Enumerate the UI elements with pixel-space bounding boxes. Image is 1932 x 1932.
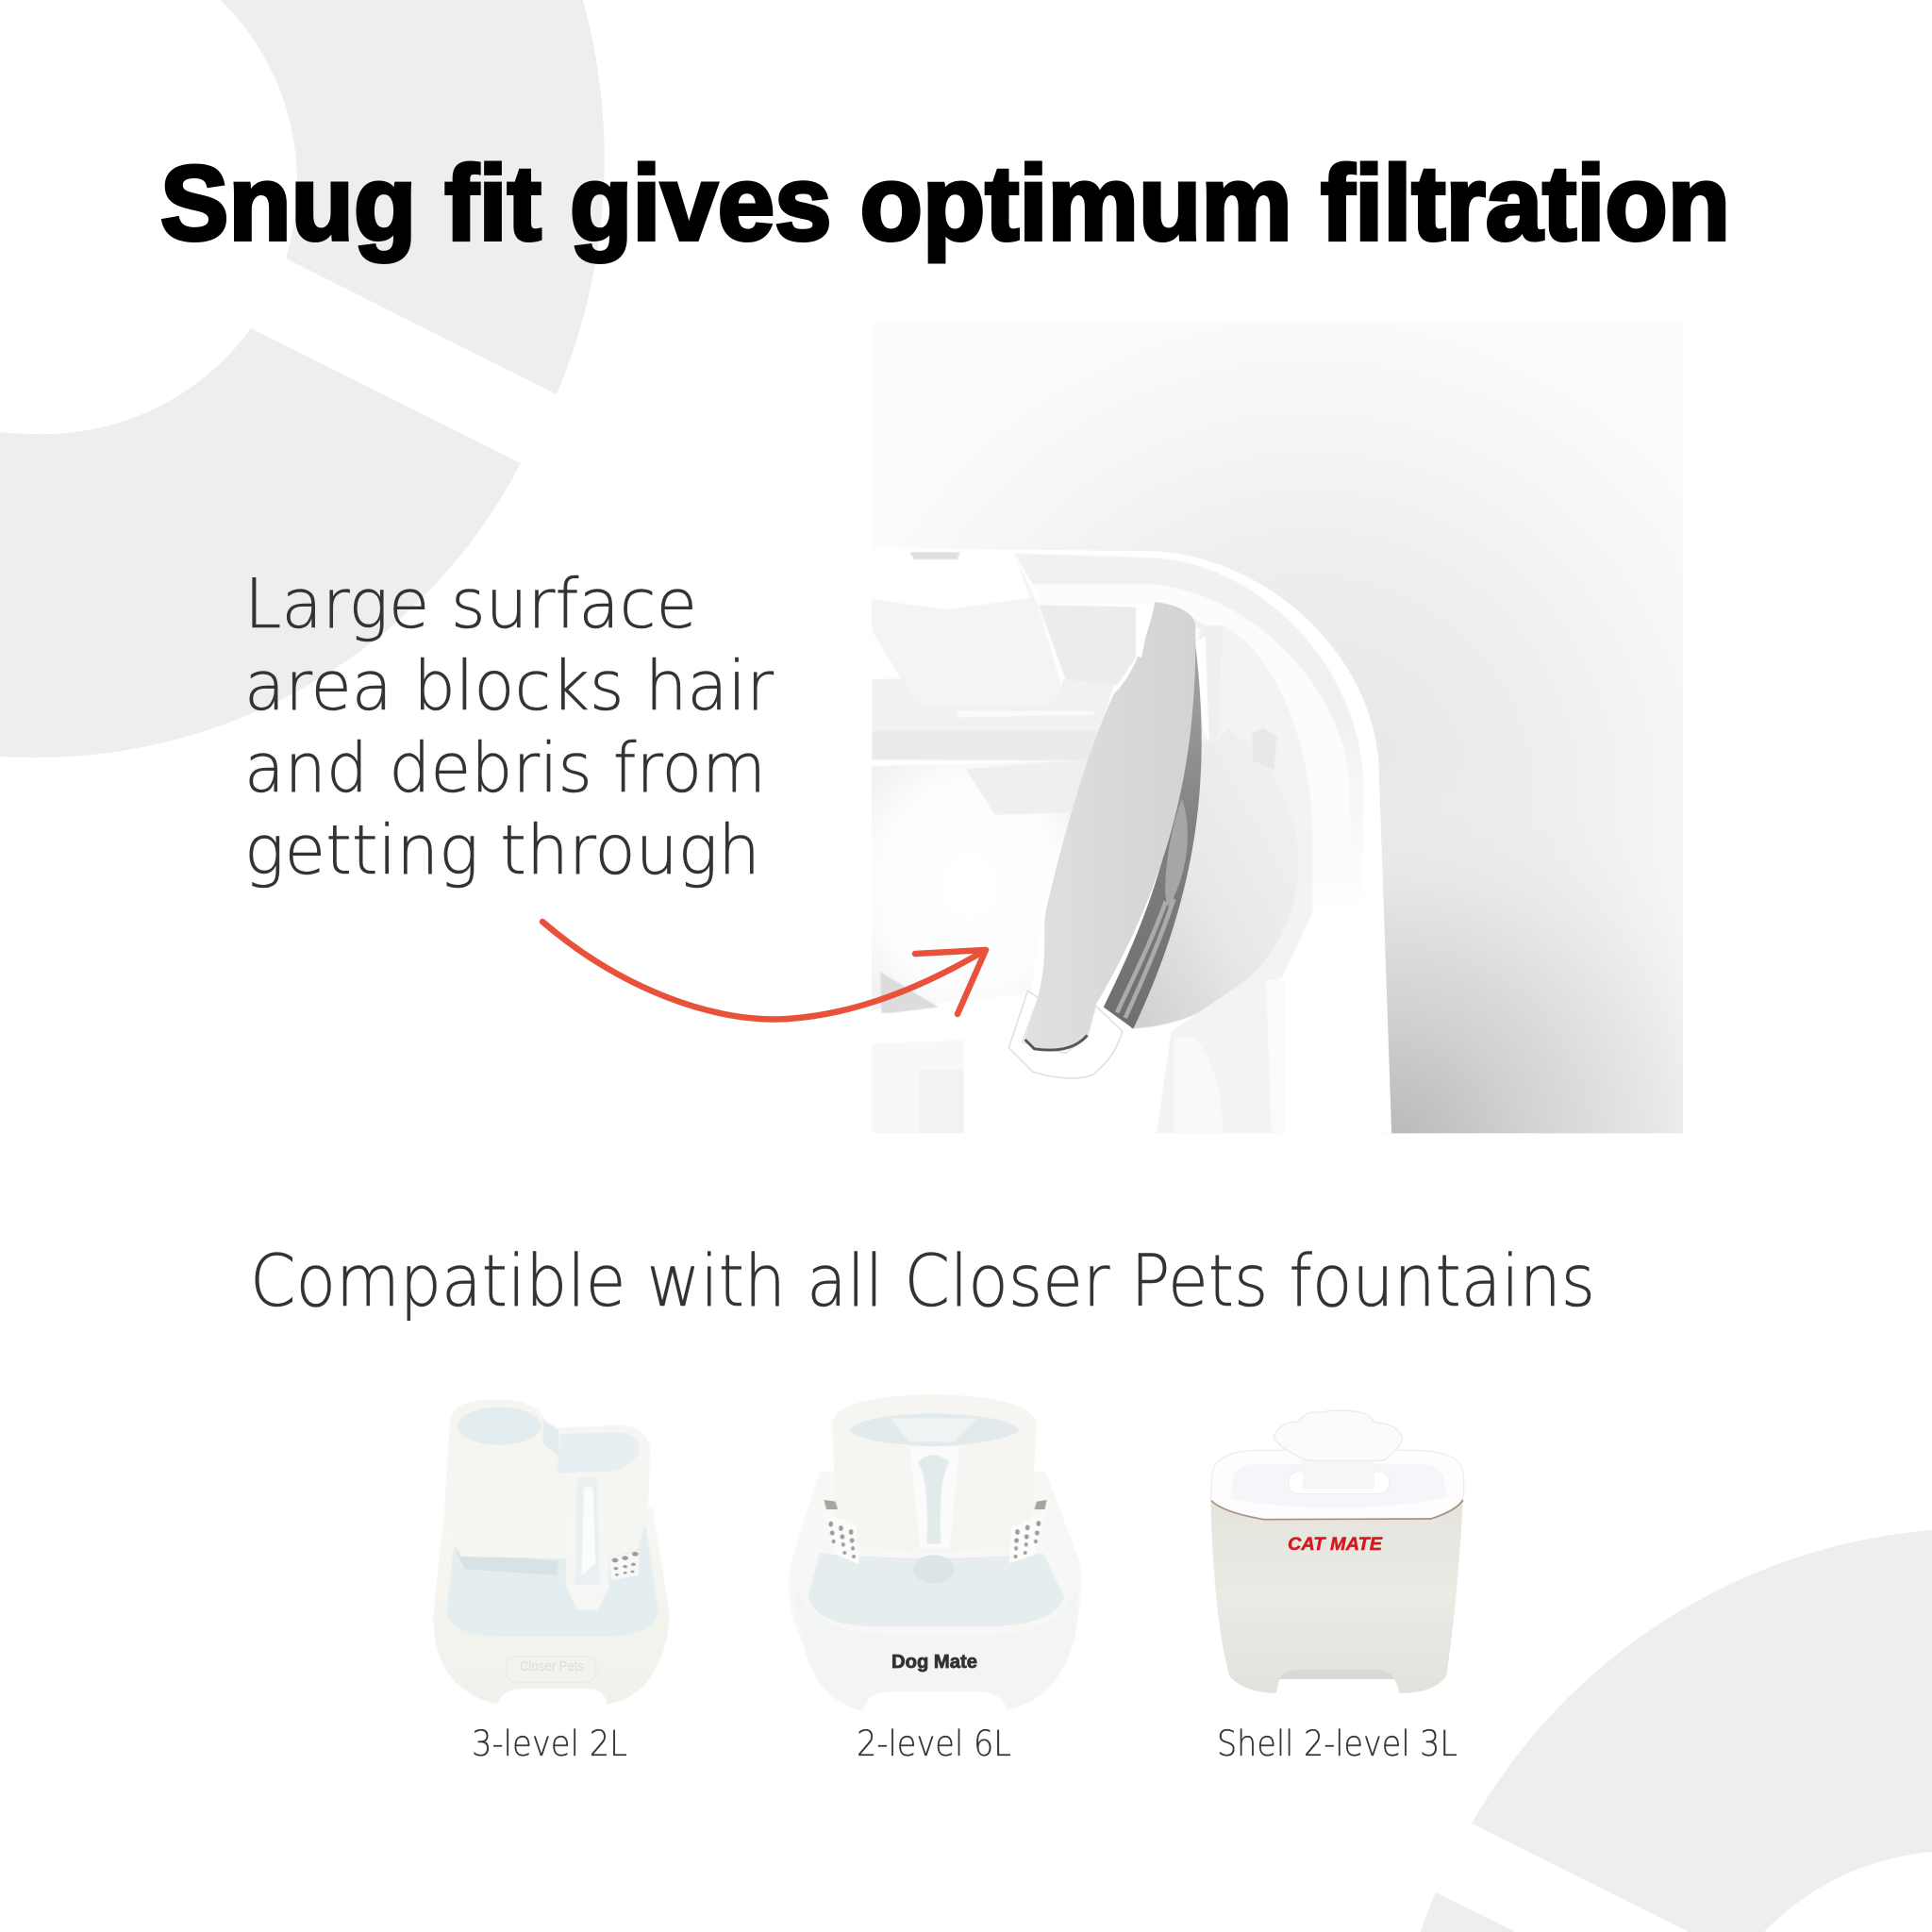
brand plate: [507, 1657, 596, 1682]
arrow: [542, 922, 986, 1019]
front ledge: [881, 1013, 887, 1015]
tray: [789, 1472, 1081, 1710]
body text: Large surface: [244, 564, 697, 643]
panel background: [872, 324, 1683, 1133]
water: [808, 1554, 1064, 1626]
upper water: [557, 1432, 639, 1474]
label: 3-level 2L: 3-level 2L: [472, 1724, 627, 1764]
filter media layers: [1104, 636, 1202, 1029]
body text: and debris from: [244, 728, 766, 808]
subheading: Compatible with all Closer Pets fountains: [250, 1239, 1595, 1323]
body text: [244, 564, 774, 890]
spout collar: [1289, 1472, 1390, 1493]
lid: [1210, 1450, 1464, 1520]
divider strip: [1197, 625, 1219, 641]
top water: [849, 1413, 1019, 1446]
product shadow: [1382, 756, 1683, 1133]
pedestal stem: [1157, 977, 1282, 1133]
shell body: [1210, 1500, 1463, 1693]
tower: [832, 1394, 1037, 1552]
label: 2-level 6L: 2-level 6L: [857, 1724, 1011, 1764]
spout neck: [1303, 1456, 1374, 1489]
brand: Cat Mate: CAT MATE: [1288, 1535, 1383, 1555]
spout channel: [909, 1446, 959, 1549]
right cavity wall: [1198, 625, 1312, 1015]
fountain: 3-level 2L: [433, 1399, 670, 1705]
body text: area blocks hair: [244, 646, 774, 725]
peg: [1253, 728, 1276, 771]
right basket: [1009, 1500, 1047, 1563]
dome housing: [1130, 786, 1274, 1029]
basket: [609, 1550, 639, 1580]
lid recess: [1231, 1464, 1448, 1507]
white clip around filter foot: [1008, 991, 1123, 1078]
fountain body: [872, 548, 1391, 1133]
spout: [542, 1420, 558, 1456]
fountain: Shell 2-level 3L: [1210, 1410, 1464, 1693]
paw top: [1274, 1410, 1403, 1460]
background shape: bottom-right ring: [1421, 1530, 1932, 1932]
small triangle: [880, 972, 939, 1014]
foot shadow: [1280, 1670, 1394, 1679]
label: Shell 2-level 3L: Shell 2-level 3L: [1217, 1724, 1457, 1764]
shelf bar: [872, 679, 1113, 731]
back wall behind filter: [1039, 605, 1136, 685]
fountain: 2-level 6L: [789, 1394, 1081, 1710]
lid edge line: [1211, 1500, 1463, 1520]
panel: filter close-up photo: [872, 324, 1683, 1133]
water: [447, 1525, 658, 1637]
body text: getting through: [244, 810, 760, 890]
top bowl water: [458, 1407, 541, 1445]
title: Snug fit gives optimum filtration: [160, 144, 1730, 262]
tower: [444, 1399, 650, 1559]
water band: [456, 1552, 558, 1575]
left box: [872, 548, 1061, 705]
basin interior: [872, 760, 1088, 1009]
brand: Closer Pets: Closer Pets: [520, 1658, 584, 1674]
reflection: [913, 1555, 955, 1583]
background shape: top-left ring: [0, 0, 605, 758]
left basket: [824, 1500, 859, 1564]
water channel: [566, 1474, 609, 1610]
brand: Dog Mate: Dog Mate: [891, 1652, 977, 1673]
waterfall: [918, 1455, 950, 1544]
filter plate: [1025, 602, 1195, 1050]
tray: [433, 1507, 670, 1705]
